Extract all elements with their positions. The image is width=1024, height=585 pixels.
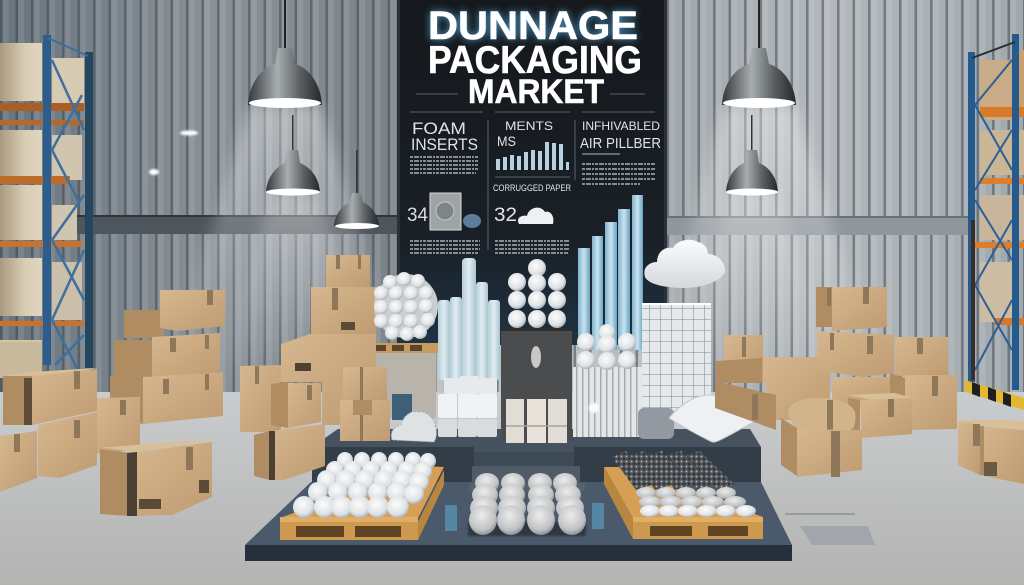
section: inflatable air pillows: INFHIVABLED xyxy=(582,119,660,133)
box with bag: right front xyxy=(781,393,912,477)
rolled foam pyramid on pedestal xyxy=(508,259,566,328)
spiky foam pile xyxy=(391,412,437,442)
title xyxy=(428,4,642,111)
box stack: right xyxy=(816,287,957,430)
pallet rack: left xyxy=(0,35,93,378)
section: foam inserts: 34 xyxy=(407,205,428,226)
box stack: right back xyxy=(715,335,890,430)
floor xyxy=(0,392,1024,585)
grid tower xyxy=(642,303,711,411)
section: bar chart: MS xyxy=(497,133,516,149)
blue foam columns chart xyxy=(578,195,643,350)
dark display panel xyxy=(397,0,667,345)
section: inflatable air pillows xyxy=(580,119,661,184)
lamp highlights xyxy=(149,130,599,413)
dark crumb rolls xyxy=(612,451,735,490)
small rolled pile on cylinder xyxy=(577,324,636,370)
lamp: large left xyxy=(248,0,322,108)
lamp: large right xyxy=(722,0,796,108)
section: inflatable air pillows: AIR PILLBER xyxy=(580,135,661,152)
bottom display platform xyxy=(245,482,792,561)
lamp: small left xyxy=(334,150,379,229)
foam ball cluster xyxy=(374,272,438,341)
section: bar chart: 32 xyxy=(494,205,517,226)
title: PACKAGING xyxy=(428,39,642,82)
section: bar chart: MENTS xyxy=(505,119,553,133)
ceiling lamps xyxy=(248,0,796,229)
crumpled mesh bundle xyxy=(638,408,674,439)
white foam cubes xyxy=(438,376,497,437)
box stack: left front xyxy=(0,342,140,492)
inflatable pillow xyxy=(669,395,754,442)
cloud: air pillow xyxy=(644,240,725,288)
right pallet with foam rolls xyxy=(604,451,763,539)
light cones xyxy=(170,105,880,390)
title: DUNNAGE xyxy=(428,4,638,48)
box stack: centre left xyxy=(240,255,390,480)
section: foam inserts xyxy=(407,119,481,253)
mid display platform xyxy=(312,429,761,482)
warehouse wall background xyxy=(0,0,1024,400)
dark central pedestal xyxy=(501,328,572,440)
section: bar chart xyxy=(493,119,571,253)
yellow and black floor bumper xyxy=(965,380,1024,410)
title: DUNNAGE xyxy=(428,4,638,48)
foam tube columns xyxy=(438,258,500,380)
horizontal wall beams xyxy=(75,215,974,235)
striped paper cylinder xyxy=(573,367,642,437)
pallet rack: right xyxy=(968,34,1024,390)
light foam rows xyxy=(636,487,756,517)
lamp: medium right xyxy=(726,115,778,196)
title: MARKET xyxy=(468,73,604,111)
floor grate sign xyxy=(785,514,875,545)
left pallet with foam balls xyxy=(280,452,444,540)
box stack: left back xyxy=(110,290,225,424)
corrugated stack: pallet and sheet xyxy=(368,343,438,420)
small carton cubes xyxy=(506,399,567,443)
lamp: medium left xyxy=(266,115,320,196)
section: bar chart: CORRUGGED PAPER xyxy=(493,183,571,193)
large box: front left xyxy=(100,441,212,516)
grey fibre mounds xyxy=(445,473,604,536)
section: foam inserts: INSERTS xyxy=(411,135,478,154)
box: far right front xyxy=(958,420,1024,484)
section: foam inserts: FOAM xyxy=(412,119,466,138)
